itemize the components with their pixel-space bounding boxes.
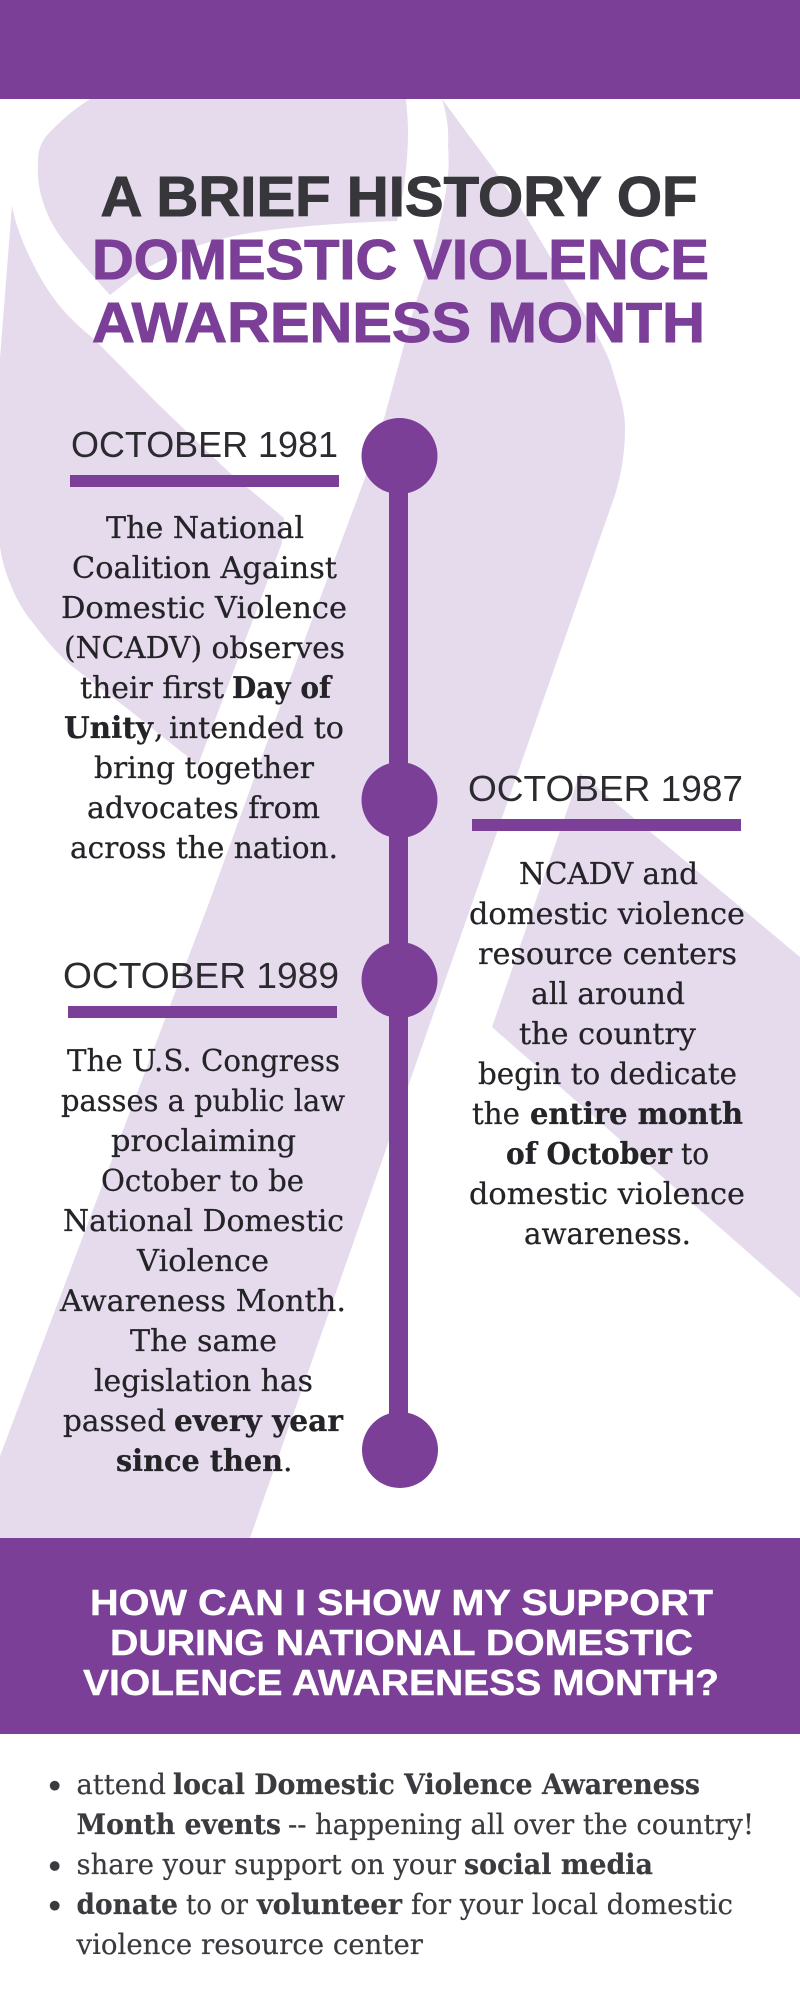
entry: October 1987: [468, 768, 745, 1252]
title: DOMESTIC VIOLENCE: [92, 228, 709, 291]
body text 1981: Unity: [64, 711, 155, 746]
body text 1989: passes a public law: [61, 1084, 345, 1119]
body text 1981: intended to: [169, 711, 344, 746]
body text 1989: legislation has: [94, 1364, 313, 1399]
body text 1989: .: [283, 1444, 293, 1479]
top header band: [0, 0, 800, 99]
support bullet list: local Domestic Violence Awareness: [173, 1768, 700, 1801]
title: [92, 165, 709, 354]
body text 1987: begin to dedicate: [478, 1057, 737, 1092]
body text 1987: the: [472, 1097, 520, 1132]
body text 1989: Violence: [136, 1244, 269, 1279]
title: AWARENESS MONTH: [92, 291, 705, 354]
support band: [0, 1538, 800, 1734]
support bullet list: donate: [76, 1888, 178, 1921]
support bullet list: for your local domestic: [411, 1888, 733, 1921]
date heading 1987: OCTOBER 1987: [468, 768, 743, 809]
support bullet list: attend: [76, 1768, 166, 1801]
support bullet list: volunteer: [256, 1888, 403, 1921]
body text 1989: passed: [63, 1404, 166, 1439]
body text 1987: awareness.: [524, 1217, 691, 1252]
body text 1989: since then: [116, 1444, 283, 1479]
body text 1989: Awareness Month.: [59, 1284, 346, 1319]
timeline line with circles: [362, 418, 438, 1488]
support bullet list: social media: [464, 1848, 653, 1881]
body text 1981: advocates from: [87, 791, 320, 826]
title: A BRIEF HISTORY OF: [100, 165, 698, 228]
body text 1987: resource centers: [478, 937, 737, 972]
body text 1981: [61, 511, 347, 866]
support bullet list: to or: [186, 1888, 249, 1921]
date heading 1981: OCTOBER 1981: [71, 424, 338, 465]
body text 1981: ,: [154, 711, 164, 746]
body text 1987: entire month: [530, 1097, 743, 1132]
support heading: DURING NATIONAL DOMESTIC: [110, 1622, 693, 1663]
body text 1987: the country: [519, 1017, 696, 1052]
body text 1989: National Domestic: [63, 1204, 344, 1239]
support bullet list: [50, 1768, 754, 1961]
support heading: [83, 1582, 719, 1703]
underline bar 1987: [472, 819, 741, 831]
body text 1981: bring together: [94, 751, 315, 786]
body text 1989: every year: [174, 1404, 344, 1439]
support bullet list: -- happening all over the country!: [288, 1808, 754, 1841]
body text 1981: their first: [80, 671, 224, 706]
support heading: VIOLENCE AWARENESS MONTH?: [83, 1662, 719, 1703]
background awareness ribbon: [0, 99, 800, 1538]
support bullet list: Month events: [76, 1808, 281, 1841]
entry: October 1981: [61, 424, 347, 866]
body text 1989: proclaiming: [111, 1124, 296, 1159]
support bullet list: violence resource center: [76, 1928, 424, 1961]
body text 1981: across the nation.: [70, 831, 338, 866]
entry: October 1989: [59, 955, 346, 1479]
body text 1981: Coalition Against: [72, 551, 337, 586]
body text 1989: The same: [130, 1324, 277, 1359]
underline bar 1981: [70, 475, 339, 487]
body text 1981: Domestic Violence: [61, 591, 347, 626]
support bullet list: share your support on your: [76, 1848, 457, 1881]
support heading: HOW CAN I SHOW MY SUPPORT: [90, 1582, 713, 1623]
body text 1981: Day of: [232, 671, 333, 706]
body text 1987: domestic violence: [469, 897, 745, 932]
body text 1981: (NCADV) observes: [64, 631, 345, 666]
underline bar 1989: [68, 1006, 337, 1018]
body text 1989: The U.S. Congress: [67, 1044, 340, 1079]
body text 1989: [59, 1044, 346, 1479]
body text 1987: of October: [506, 1137, 673, 1172]
body text 1987: to: [681, 1137, 709, 1172]
date heading 1989: OCTOBER 1989: [63, 955, 339, 996]
body text 1987: NCADV and: [519, 857, 698, 892]
body text 1987: [469, 857, 745, 1252]
body text 1989: October to be: [101, 1164, 304, 1199]
body text 1987: all around: [531, 977, 685, 1012]
body text 1987: domestic violence: [469, 1177, 745, 1212]
body text 1981: The National: [106, 511, 304, 546]
